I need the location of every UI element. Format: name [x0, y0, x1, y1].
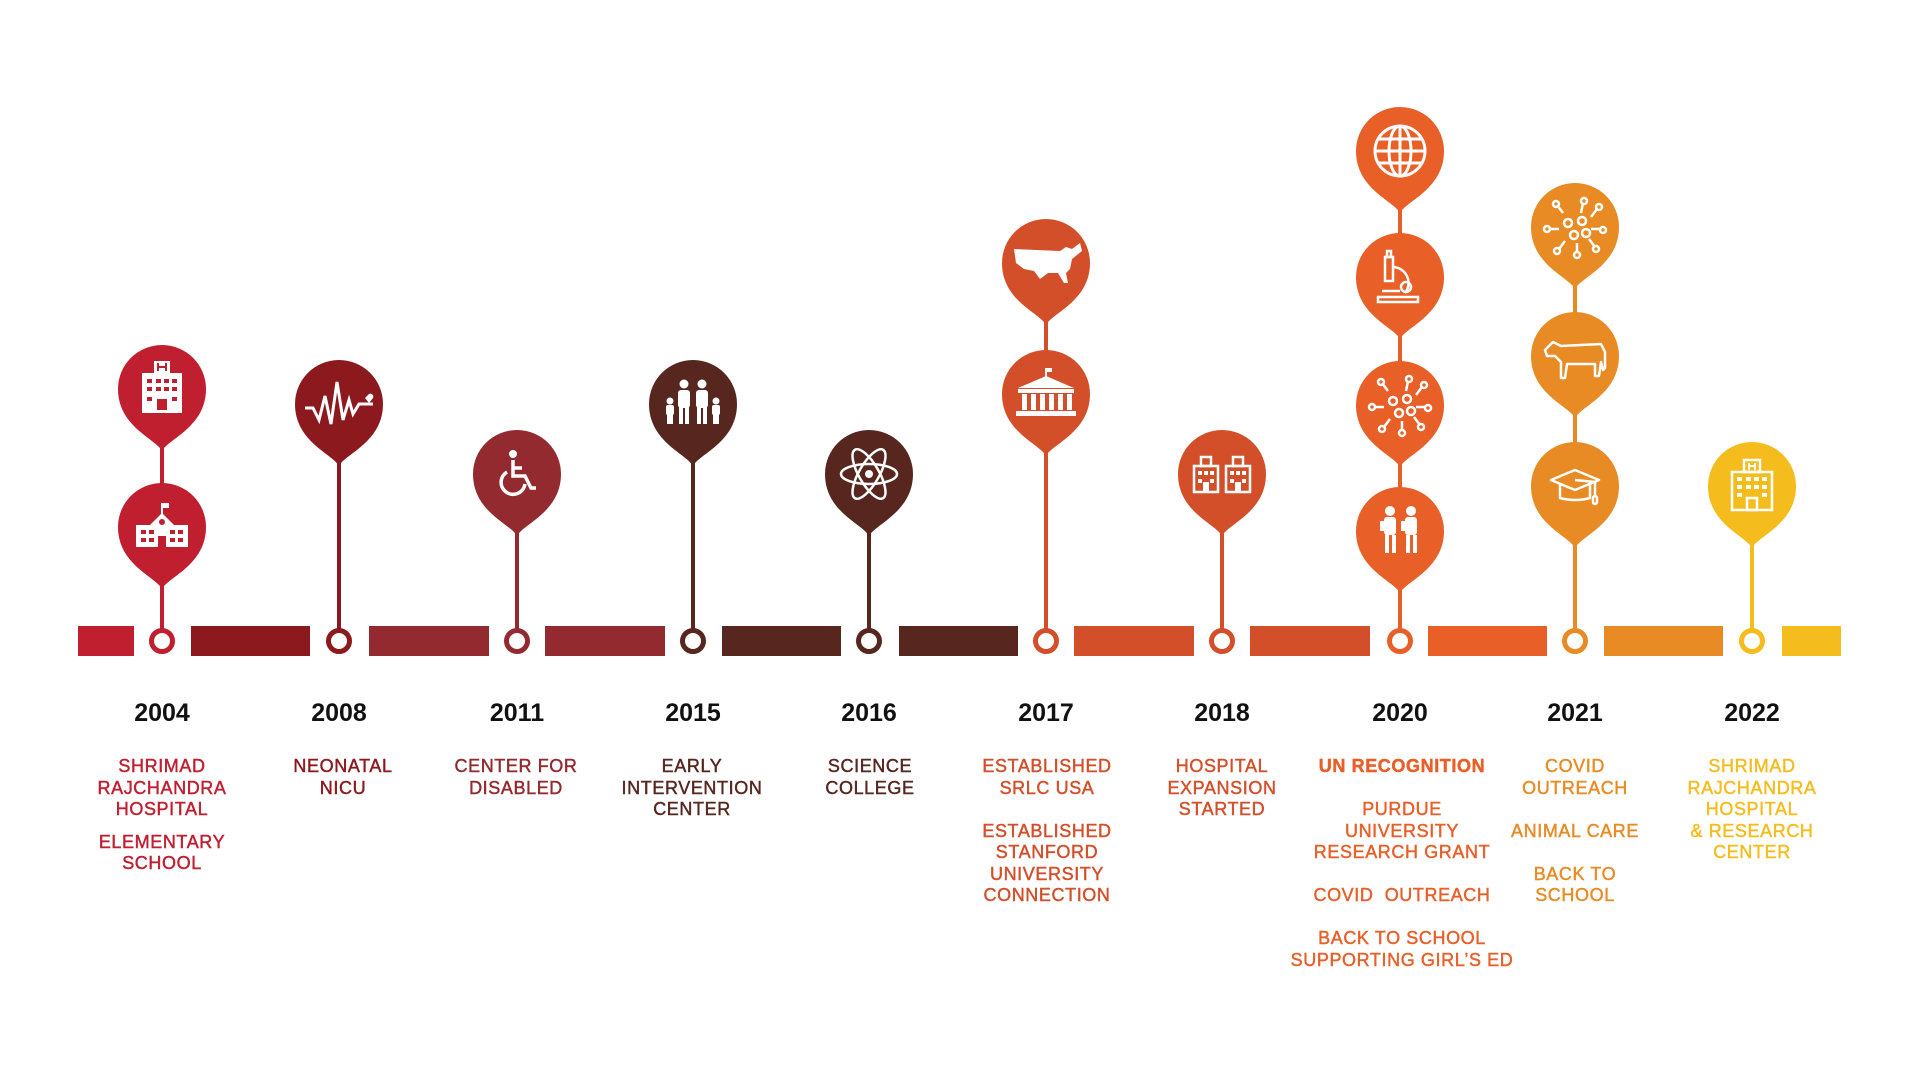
label 2020: UNIVERSITY — [1345, 820, 1459, 840]
pin: 2008 heartbeat — [295, 360, 383, 466]
label 2004 — [97, 756, 226, 873]
label 2018: EXPANSION — [1167, 778, 1277, 798]
label 2016: COLLEGE — [825, 778, 915, 798]
label 2018 — [1167, 756, 1277, 819]
label 2004: SCHOOL — [122, 853, 202, 873]
label 2021: COVID — [1545, 756, 1605, 776]
pin: 2015 family — [649, 360, 737, 466]
label 2015: INTERVENTION — [622, 778, 762, 798]
label 2015 — [622, 756, 762, 819]
label 2022: & RESEARCH — [1690, 820, 1814, 840]
label 2022: SHRIMAD — [1708, 756, 1796, 776]
label 2020: RESEARCH GRANT — [1314, 842, 1490, 862]
label 2004: RAJCHANDRA — [97, 778, 226, 798]
year 2016: 2016 — [841, 699, 897, 727]
label 2011: CENTER FOR — [454, 756, 578, 776]
label 2020: COVID OUTREACH — [1313, 885, 1490, 905]
label 2021: BACK TO — [1534, 864, 1616, 884]
label 2021 — [1510, 756, 1639, 905]
label 2017: SRLC USA — [1000, 778, 1094, 798]
label 2015: CENTER — [653, 799, 731, 819]
label 2021: OUTREACH — [1522, 778, 1628, 798]
label 2017: CONNECTION — [984, 885, 1110, 905]
pin: 2016 atom — [825, 430, 913, 536]
label 2011 — [454, 756, 578, 798]
pin: 2011 wheelchair — [473, 430, 561, 536]
label 2015: EARLY — [662, 756, 722, 776]
label 2021: SCHOOL — [1535, 885, 1615, 905]
label 2017: UNIVERSITY — [990, 864, 1104, 884]
label 2004: HOSPITAL — [116, 799, 208, 819]
pin: 2004 school — [118, 483, 206, 589]
label 2011: DISABLED — [469, 778, 563, 798]
label 2017 — [982, 756, 1112, 905]
year 2022: 2022 — [1724, 699, 1780, 727]
label 2018: STARTED — [1179, 799, 1265, 819]
label 2016 — [825, 756, 915, 798]
stems — [162, 151, 1752, 630]
pin: 2020 virus — [1356, 361, 1444, 467]
label 2008: NICU — [320, 778, 366, 798]
rings — [152, 630, 1762, 652]
pin: 2020 microscope — [1356, 233, 1444, 339]
year 2008: 2008 — [311, 699, 367, 727]
label 2004: ELEMENTARY — [99, 832, 225, 852]
label 2020: BACK TO SCHOOL — [1318, 928, 1486, 948]
label 2017: ESTABLISHED — [982, 756, 1112, 776]
label 2017: STANFORD — [996, 842, 1098, 862]
label 2020: SUPPORTING GIRL’S ED — [1291, 950, 1513, 970]
label 2022: CENTER — [1713, 842, 1791, 862]
label 2020: UN RECOGNITION — [1319, 756, 1485, 776]
year 2020: 2020 — [1372, 699, 1428, 727]
year 2021: 2021 — [1547, 699, 1603, 727]
year 2004: 2004 — [134, 699, 190, 727]
label 2020: PURDUE — [1362, 799, 1442, 819]
pin: 2020 school girls — [1356, 487, 1444, 593]
pin: 2021 cow — [1531, 312, 1619, 418]
label 2004: SHRIMAD — [118, 756, 206, 776]
label 2020 — [1291, 756, 1513, 970]
label 2022: RAJCHANDRA — [1687, 778, 1816, 798]
pin: 2021 virus — [1531, 183, 1619, 289]
label 2022: HOSPITAL — [1706, 799, 1798, 819]
label 2017: ESTABLISHED — [982, 820, 1112, 840]
label 2008: NEONATAL — [293, 756, 393, 776]
pin: 2020 globe — [1356, 107, 1444, 213]
year 2017: 2017 — [1018, 699, 1074, 727]
pin: 2021 graduation cap — [1531, 442, 1619, 548]
pin: 2017 USA map — [1002, 219, 1090, 325]
year 2011: 2011 — [490, 699, 544, 727]
label 2022 — [1687, 756, 1816, 862]
pin: 2022 hospital — [1708, 442, 1796, 548]
label 2018: HOSPITAL — [1176, 756, 1268, 776]
timeline bar — [78, 626, 1841, 656]
pin: 2017 university building — [1002, 350, 1090, 456]
pin: 2004 hospital — [118, 345, 206, 451]
label 2016: SCIENCE — [828, 756, 912, 776]
pin: 2018 hospitals — [1178, 430, 1266, 536]
year 2015: 2015 — [665, 699, 721, 727]
label 2008 — [293, 756, 393, 798]
label 2021: ANIMAL CARE — [1511, 820, 1639, 840]
year 2018: 2018 — [1194, 699, 1250, 727]
